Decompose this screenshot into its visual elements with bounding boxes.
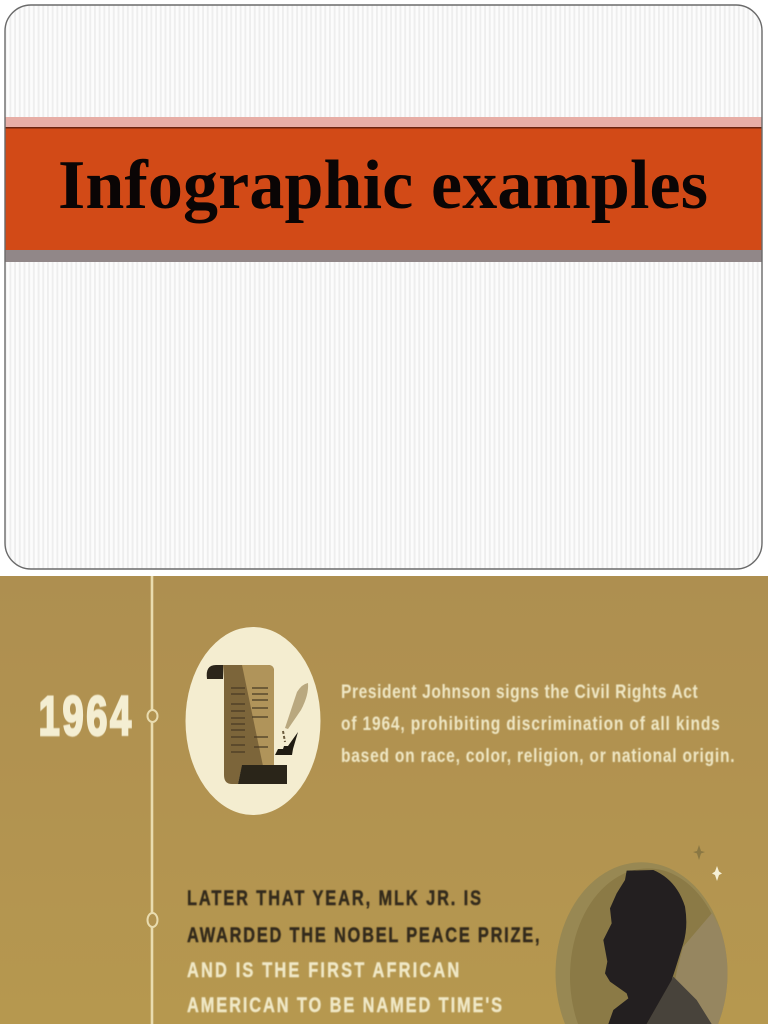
title: Infographic examples bbox=[58, 147, 708, 224]
icon: Nobel medal with silhouette bbox=[556, 862, 730, 1024]
icon: scroll and quill in cream oval bbox=[186, 627, 320, 815]
card outline bbox=[5, 5, 762, 569]
description text: President Johnson signs the Civil Rights Act bbox=[341, 681, 698, 702]
caption text: AMERICAN TO BE NAMED TIME'S bbox=[187, 993, 502, 1016]
description text bbox=[341, 681, 735, 766]
striped card background bbox=[5, 5, 762, 569]
gold background bbox=[0, 576, 768, 1024]
timeline line with markers bbox=[148, 576, 158, 1024]
description text: based on race, color, religion, or national origin. bbox=[341, 745, 735, 766]
description text: of 1964, prohibiting discrimination of all kinds bbox=[341, 713, 720, 734]
caption text bbox=[187, 886, 540, 1016]
title banner bbox=[5, 117, 762, 262]
caption text: AWARDED THE NOBEL PEACE PRIZE, bbox=[187, 923, 540, 946]
icon: stars bbox=[693, 845, 722, 881]
panel: title slide card bbox=[5, 5, 762, 569]
year label 1964: 1964 bbox=[39, 686, 131, 748]
caption text: LATER THAT YEAR, MLK JR. IS bbox=[187, 886, 481, 909]
caption text: AND IS THE FIRST AFRICAN bbox=[187, 958, 459, 981]
panel: civil rights timeline excerpt bbox=[0, 576, 768, 1024]
